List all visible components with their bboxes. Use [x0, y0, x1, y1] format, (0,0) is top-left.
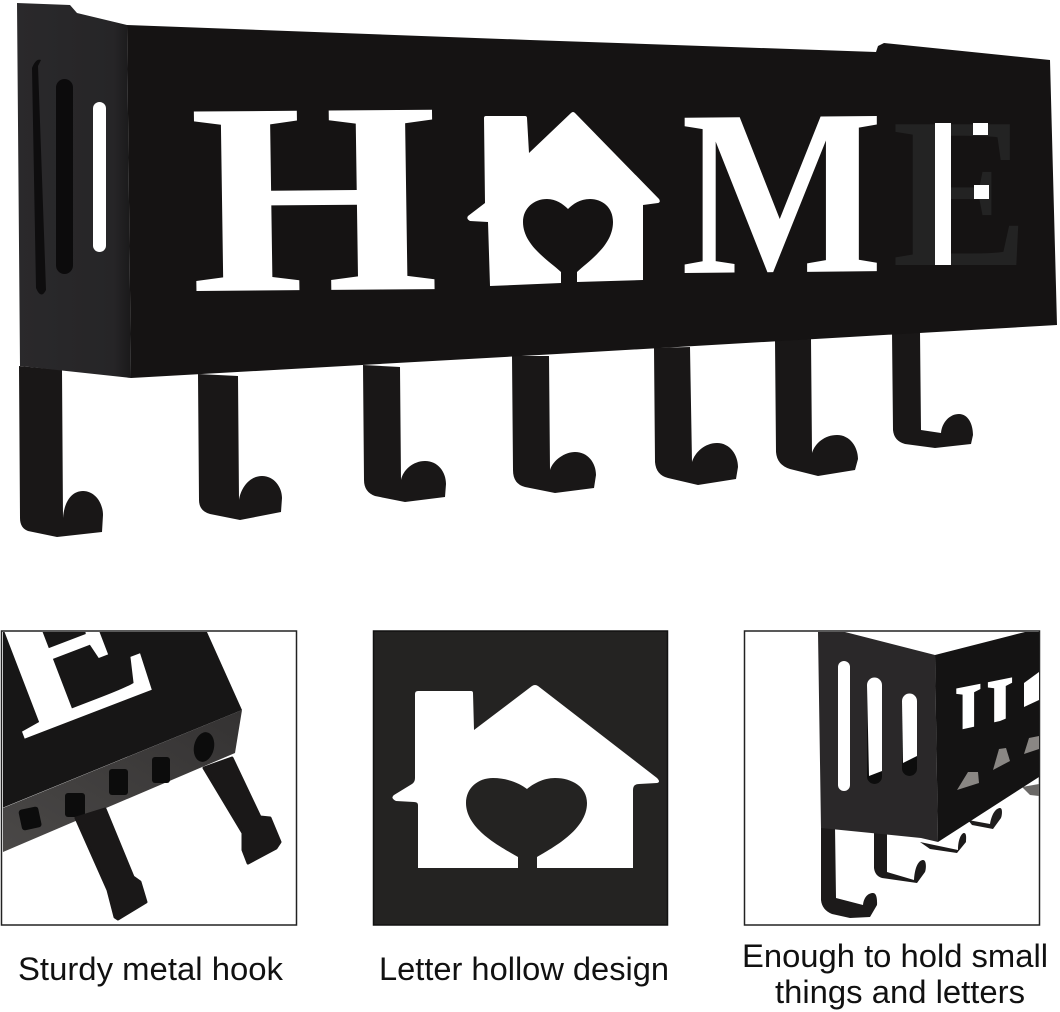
metal screws behind — [957, 736, 1039, 790]
panel: letter hollow design detail — [374, 631, 668, 925]
bracket front panel — [127, 25, 1057, 378]
house cut-out with heart — [392, 685, 659, 868]
panel: sturdy metal hook detail — [0, 630, 298, 926]
side slot 2 — [56, 79, 73, 274]
cut-out house with heart — [467, 112, 660, 286]
cut-out letter H: H — [187, 46, 441, 351]
side slot 1 — [32, 60, 46, 295]
letter H partial: H — [955, 642, 1013, 820]
bracket front — [2, 632, 242, 808]
side panel — [818, 632, 938, 842]
hook second — [874, 832, 926, 883]
hook right — [204, 758, 280, 863]
front panel — [935, 632, 1039, 842]
underside with holes — [3, 710, 242, 852]
slot 3 — [902, 694, 917, 776]
caption: enough to hold small things and letters — [742, 938, 1048, 1010]
main product photo: HOME key rack — [17, 3, 1057, 537]
side slot 3 — [93, 102, 106, 252]
next letter fragment — [1024, 672, 1039, 707]
bracket side panel — [17, 3, 131, 378]
panel frame background — [744, 631, 1040, 925]
hook 5 — [654, 347, 738, 485]
caption: enough to hold small things and letters: things and letters — [775, 974, 1025, 1010]
hook 1 — [19, 366, 103, 537]
slot 1 — [838, 661, 850, 791]
hook 6 — [775, 339, 858, 476]
caption: letter hollow design: Letter hollow design — [379, 951, 669, 987]
panel frame background — [2, 631, 296, 925]
underside holes — [18, 730, 217, 831]
hook fifth — [1022, 784, 1039, 796]
panel: side view holding small things — [744, 631, 1040, 925]
caption: enough to hold small things and letters: Enough to hold small — [742, 938, 1048, 974]
cut-out letter M: M — [681, 60, 883, 324]
hook 4 — [512, 356, 596, 493]
hook 2 — [198, 374, 282, 520]
dark textured background — [374, 631, 668, 925]
hook near — [821, 826, 877, 918]
close-up bracket with E and hooks — [3, 632, 282, 920]
hook fourth — [968, 808, 1002, 829]
hook 7 — [892, 331, 973, 448]
caption: sturdy metal hook: Sturdy metal hook — [18, 951, 284, 987]
hook 3 — [363, 365, 446, 502]
hook left — [76, 809, 146, 919]
hook third — [920, 833, 966, 853]
letter E seen through the wall, mostly dark: E — [892, 75, 1029, 312]
slot 2 — [867, 678, 882, 784]
